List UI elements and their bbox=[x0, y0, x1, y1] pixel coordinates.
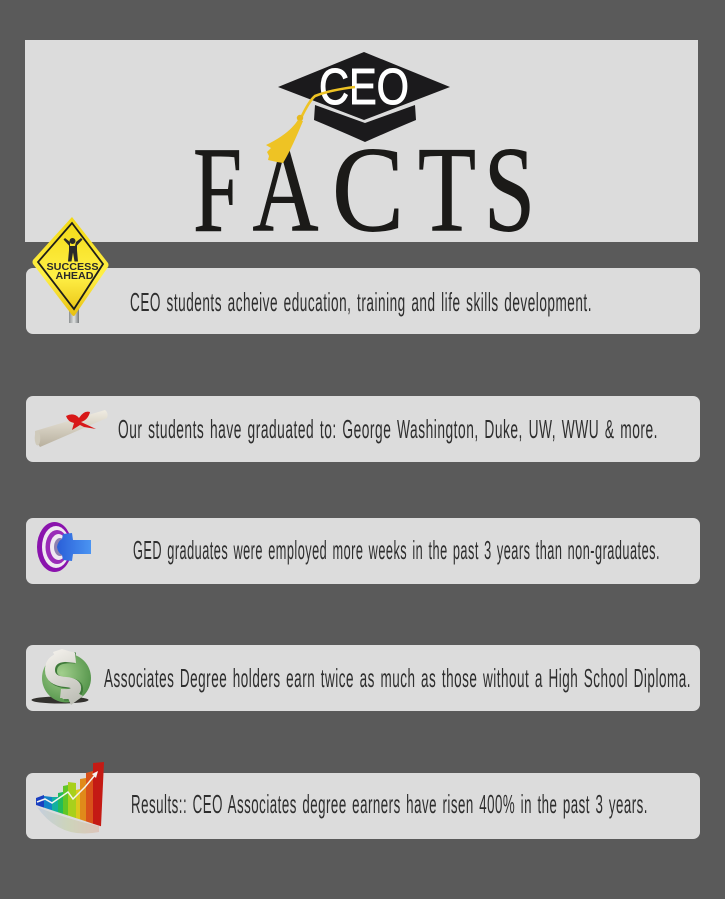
icon: diploma scroll bbox=[35, 410, 108, 447]
panel: fact 1 bbox=[26, 268, 700, 334]
panel: fact 4 bbox=[26, 645, 700, 711]
panel: header bbox=[25, 40, 698, 258]
title: FACTS: F bbox=[193, 122, 242, 258]
cap label: CEO: CEO bbox=[319, 58, 409, 115]
icon: target with arrow bbox=[37, 522, 91, 572]
icon: tassel bbox=[266, 87, 355, 163]
icon: success ahead sign: AHEAD bbox=[56, 270, 94, 282]
panel: fact 3 bbox=[26, 518, 700, 584]
icon: graduation cap bbox=[266, 52, 450, 163]
icon: rising bar chart bbox=[36, 762, 104, 834]
icon: success ahead sign bbox=[32, 217, 108, 323]
title: FACTS bbox=[193, 122, 535, 258]
icon: dollar sign coin bbox=[32, 649, 91, 705]
title: FACTS: C bbox=[332, 122, 404, 258]
panel: fact 2 bbox=[26, 396, 700, 462]
icon: success ahead sign: SUCCESS bbox=[46, 261, 98, 273]
title: FACTS: A bbox=[252, 122, 318, 258]
trend line bbox=[37, 771, 98, 803]
title: FACTS: S bbox=[484, 122, 535, 258]
title: FACTS: T bbox=[418, 122, 476, 258]
panel: fact 5 bbox=[26, 762, 700, 839]
